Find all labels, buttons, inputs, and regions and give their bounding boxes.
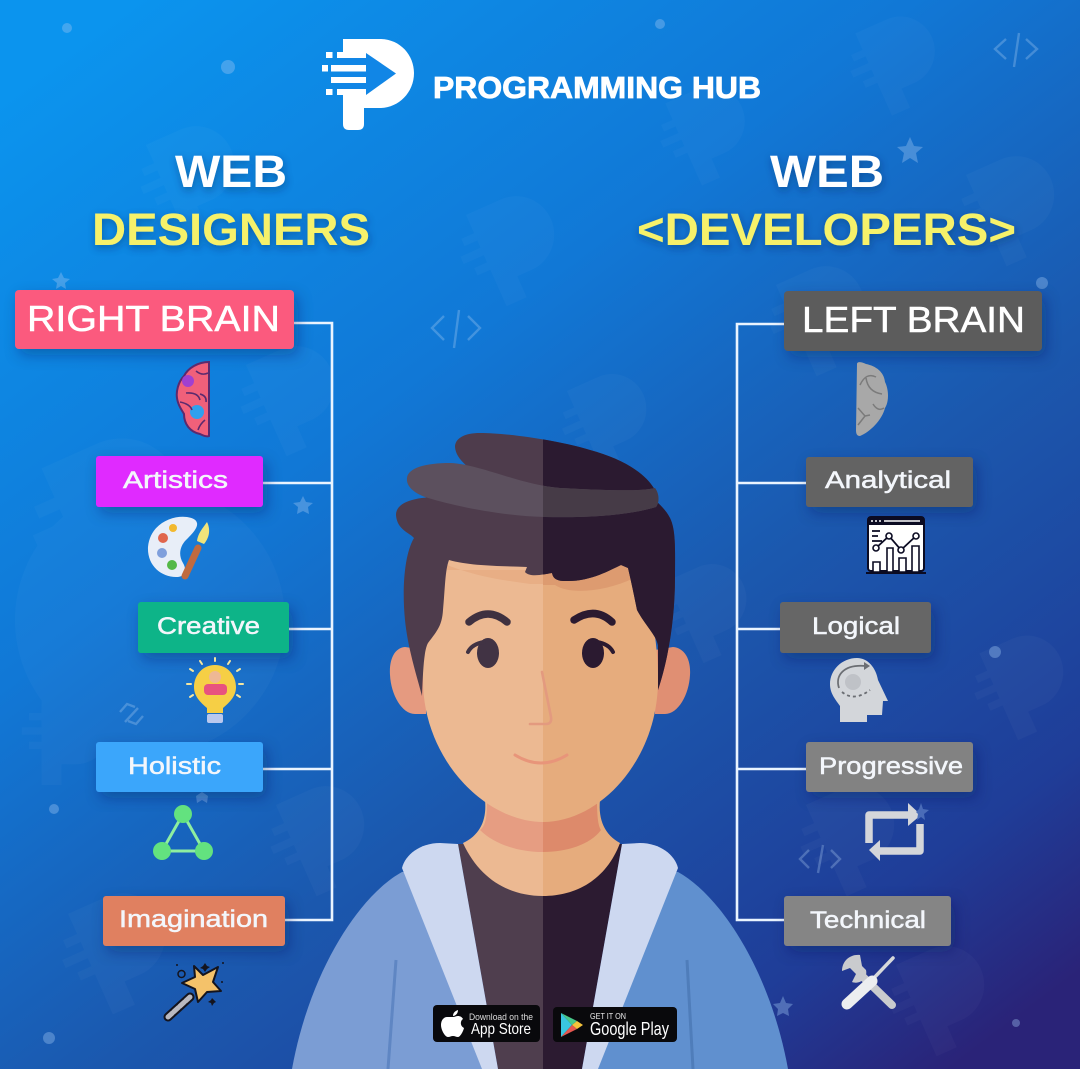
connector lines: right brain bbox=[261, 323, 332, 920]
icon: play triangle bbox=[561, 1013, 583, 1037]
badge: app store: Download on the bbox=[469, 1012, 533, 1022]
label: right brain bbox=[15, 290, 294, 349]
brand name: PROGRAMMING HUB bbox=[433, 70, 761, 105]
character bbox=[292, 433, 788, 1069]
label: holistic bbox=[96, 742, 263, 792]
label: progressive bbox=[806, 742, 973, 792]
badge: app store bbox=[433, 1005, 540, 1042]
panel: right brain bbox=[15, 290, 294, 1017]
label: holistic: Holistic bbox=[128, 753, 221, 780]
heading: web designers: DESIGNERS bbox=[92, 204, 370, 255]
label: creative: Creative bbox=[157, 613, 260, 640]
label: analytical: Analytical bbox=[825, 467, 951, 494]
label: technical: Technical bbox=[810, 907, 926, 934]
hair bbox=[396, 433, 675, 696]
label: imagination bbox=[103, 896, 285, 946]
logo: Programming Hub bbox=[322, 39, 761, 130]
label: left brain: LEFT BRAIN bbox=[802, 299, 1025, 340]
label: imagination: Imagination bbox=[119, 906, 268, 933]
label: artistics: Artistics bbox=[123, 467, 228, 494]
panel: left brain bbox=[780, 291, 1042, 1005]
icon: left half brain bbox=[856, 362, 888, 436]
badge: google play bbox=[553, 1007, 677, 1042]
label: analytical bbox=[806, 457, 973, 507]
icon: wrench and screwdriver bbox=[842, 955, 893, 1005]
label: right brain: RIGHT BRAIN bbox=[27, 298, 280, 339]
icon: apple bbox=[441, 1010, 464, 1037]
icon: triangle network bbox=[153, 805, 213, 860]
label: artistics bbox=[96, 456, 263, 507]
shirt bbox=[458, 844, 622, 1069]
icon: analytics window bbox=[866, 517, 926, 573]
badge: google play: Google Play bbox=[590, 1019, 669, 1039]
icon: repeat arrows bbox=[869, 803, 929, 861]
label: logical bbox=[780, 602, 931, 653]
label: technical bbox=[784, 896, 951, 946]
label: logical: Logical bbox=[812, 613, 900, 640]
connector lines: left brain bbox=[737, 324, 808, 920]
collar bbox=[402, 843, 678, 1069]
face bbox=[423, 555, 658, 822]
label: progressive: Progressive bbox=[819, 753, 963, 780]
facial features bbox=[468, 613, 613, 763]
icon: right half brain bbox=[177, 362, 209, 436]
ears bbox=[390, 647, 690, 714]
icon: light bulb bbox=[187, 658, 243, 723]
heading: web designers bbox=[92, 146, 370, 255]
heading: web developers: WEB bbox=[770, 146, 884, 197]
jacket bbox=[292, 870, 788, 1069]
badge: google play: GET IT ON bbox=[590, 1011, 626, 1021]
heading: web developers: <DEVELOPERS> bbox=[637, 204, 1016, 255]
heading: web designers: WEB bbox=[175, 146, 287, 197]
icon: magic wand bbox=[168, 962, 224, 1017]
badge: app store: App Store bbox=[471, 1021, 531, 1038]
icon: P mark bbox=[322, 39, 414, 130]
label: creative bbox=[138, 602, 289, 653]
neck bbox=[463, 800, 620, 896]
icon: head with gear bbox=[830, 658, 888, 722]
label: left brain bbox=[784, 291, 1042, 351]
icon: paint palette bbox=[148, 517, 209, 577]
heading: web developers bbox=[637, 146, 1016, 255]
